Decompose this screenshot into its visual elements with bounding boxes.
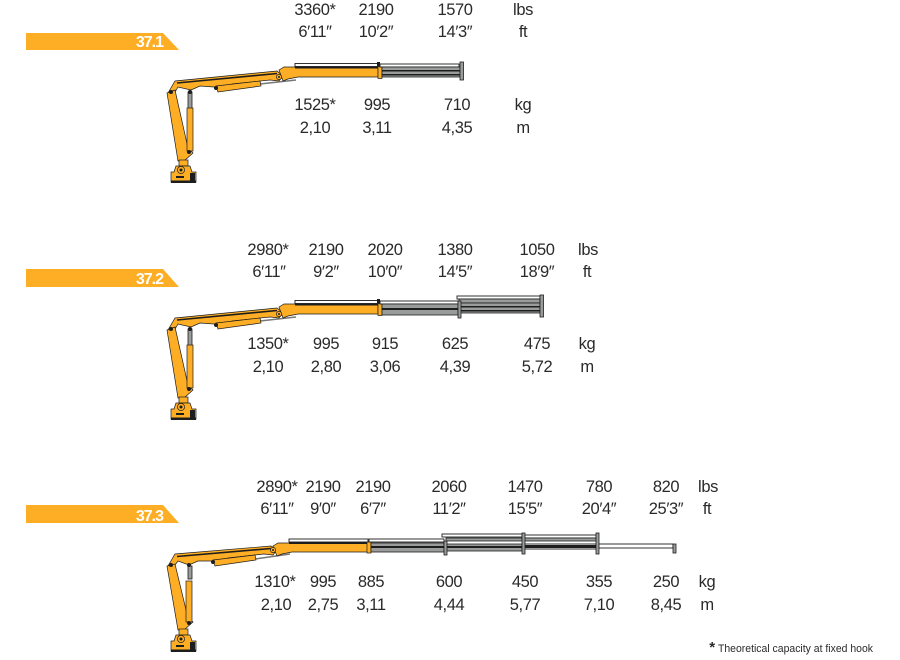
load table: model 37.1 upper values: 3360* (294, 1, 337, 19)
load table: model 37.3 lower values: 2,75 (308, 596, 338, 614)
load table: model 37.1 lower values: 995 (364, 96, 390, 114)
load table: model 37.1 lower values: 2,10 (300, 119, 330, 137)
load table: model 37.3 lower values (254, 573, 716, 614)
load table: model 37.3 lower values: 355 (586, 573, 612, 591)
load table: model 37.3 lower values: 450 (512, 573, 538, 591)
crane drawing: model 37.1 (167, 62, 464, 183)
load table: model 37.1 lower values: 710 (444, 96, 470, 114)
load table: model 37.3 upper values: 2190 (355, 478, 391, 496)
load table: model 37.2 lower values (247, 335, 596, 376)
load table: model 37.3 lower values: 995 (310, 573, 336, 591)
footnote: Theoretical capacity at fixed hook (718, 643, 873, 655)
load table: model 37.1 upper values: 14′3″ (438, 23, 473, 41)
load table: model 37.2 upper values: 1050 (519, 241, 555, 259)
load table: model 37.3 upper values: 820 (653, 478, 679, 496)
load table: model 37.3 lower values: 5,77 (510, 596, 540, 614)
load table: model 37.2 lower values: 4,39 (440, 358, 470, 376)
load table: model 37.3 lower values: 4,44 (434, 596, 464, 614)
banner: model 37.1 (26, 33, 179, 51)
load table: model 37.3 upper values: 6′7″ (360, 500, 386, 518)
load table: model 37.3 upper values: 15′5″ (508, 500, 543, 518)
load table: model 37.2 upper values: 2190 (308, 241, 344, 259)
load table: model 37.2 lower values: kg (579, 335, 596, 353)
load table: model 37.2 lower values: 915 (372, 335, 398, 353)
load table: model 37.2 upper values: lbs (578, 241, 598, 259)
load table: model 37.3 upper values: 2060 (431, 478, 467, 496)
load table: model 37.3 lower values: kg (699, 573, 716, 591)
load table: model 37.1 lower values: 3,11 (362, 119, 392, 137)
load table: model 37.2 upper values: 18′9″ (520, 263, 555, 281)
load table: model 37.3 lower values: m (700, 596, 714, 614)
load table: model 37.1 lower values: 1525* (294, 96, 337, 114)
load table: model 37.1 lower values: m (516, 119, 530, 137)
banner: model 37.3 (26, 505, 179, 525)
load table: model 37.3 upper values: 2890* (256, 478, 299, 496)
load table: model 37.1 upper values: 2190 (358, 1, 394, 19)
load table: model 37.3 upper values: 9′0″ (310, 500, 336, 518)
load table: model 37.1 lower values (294, 96, 532, 137)
load table: model 37.3 upper values: ft (703, 500, 712, 518)
load table: model 37.2 upper values: 2020 (367, 241, 403, 259)
load table: model 37.1 upper values: lbs (513, 1, 533, 19)
footnote: * (709, 639, 715, 656)
load table: model 37.2 upper values: 14′5″ (438, 263, 473, 281)
load table: model 37.3 upper values: 11′2″ (432, 500, 466, 518)
crane drawing: model 37.3 (167, 533, 676, 652)
banner: model 37.1: 37.1 (136, 34, 164, 51)
crane base (171, 403, 196, 420)
load table: model 37.3 upper values: 780 (586, 478, 612, 496)
load table: model 37.2 lower values: 995 (313, 335, 339, 353)
load table: model 37.3 upper values: 6′11″ (260, 500, 294, 518)
load table: model 37.1 upper values (294, 1, 533, 41)
load table: model 37.2 upper values: 6′11″ (252, 263, 286, 281)
load table: model 37.2 upper values: 10′0″ (368, 263, 403, 281)
load table: model 37.1 lower values: kg (515, 96, 532, 114)
load table: model 37.2 upper values: ft (583, 263, 592, 281)
load table: model 37.1 upper values: 10′2″ (359, 23, 394, 41)
load table: model 37.2 upper values (247, 241, 598, 281)
load table: model 37.3 lower values: 885 (358, 573, 384, 591)
load table: model 37.2 upper values: 9′2″ (313, 263, 339, 281)
load table: model 37.3 lower values: 250 (653, 573, 679, 591)
crane base (171, 635, 196, 652)
crane drawing: model 37.2 (167, 295, 544, 420)
load table: model 37.1 upper values: 1570 (437, 1, 473, 19)
load table: model 37.2 upper values: 1380 (437, 241, 473, 259)
load table: model 37.2 lower values: m (580, 358, 594, 376)
banner: model 37.2: 37.2 (136, 271, 164, 288)
load table: model 37.3 upper values (256, 478, 718, 518)
load table: model 37.2 lower values: 3,06 (370, 358, 400, 376)
load table: model 37.2 lower values: 1350* (247, 335, 290, 353)
load table: model 37.3 upper values: 25′3″ (649, 500, 684, 518)
footnote (709, 639, 873, 656)
load table: model 37.3 upper values: 1470 (507, 478, 543, 496)
load table: model 37.2 lower values: 2,80 (311, 358, 341, 376)
load table: model 37.3 lower values: 1310* (254, 573, 297, 591)
load table: model 37.1 upper values: 6′11″ (298, 23, 332, 41)
load table: model 37.3 lower values: 3,11 (356, 596, 386, 614)
banner: model 37.3: 37.3 (136, 508, 164, 525)
banner: model 37.2 (26, 269, 179, 288)
load table: model 37.3 lower values: 2,10 (261, 596, 291, 614)
load table: model 37.3 lower values: 8,45 (651, 596, 681, 614)
load table: model 37.1 upper values: ft (519, 23, 528, 41)
load table: model 37.3 upper values: lbs (698, 478, 718, 496)
load table: model 37.3 upper values: 2190 (305, 478, 341, 496)
crane base (171, 166, 196, 183)
load table: model 37.3 upper values: 20′4″ (582, 500, 617, 518)
load table: model 37.2 lower values: 2,10 (253, 358, 283, 376)
load table: model 37.2 upper values: 2980* (247, 241, 290, 259)
load table: model 37.2 lower values: 5,72 (522, 358, 552, 376)
load table: model 37.3 lower values: 600 (436, 573, 462, 591)
load table: model 37.2 lower values: 475 (524, 335, 550, 353)
load table: model 37.1 lower values: 4,35 (442, 119, 472, 137)
load table: model 37.3 lower values: 7,10 (584, 596, 614, 614)
load table: model 37.2 lower values: 625 (442, 335, 468, 353)
